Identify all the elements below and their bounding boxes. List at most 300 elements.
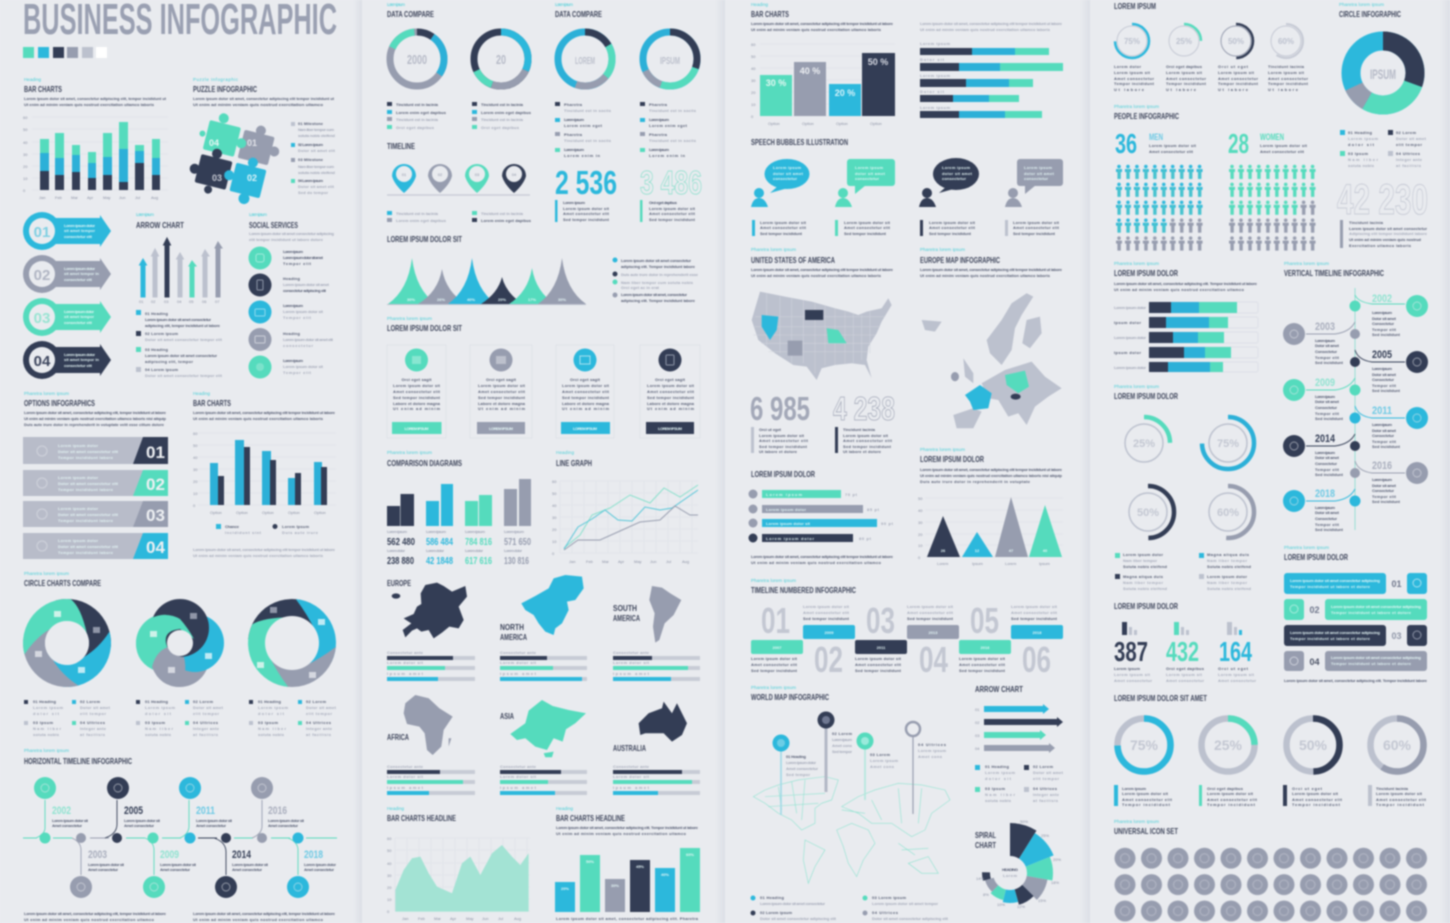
stacked horizontal bars: Lorem ipsum — [920, 41, 950, 46]
gauge legend: Soluta nobis eleifend — [1123, 564, 1168, 569]
icon progress bars: Ut enim ad minim veniam quis nostrud exercitation ullamco — [751, 560, 882, 565]
badge 04 — [23, 341, 111, 379]
vertical timeline: Dolor sit amet — [1372, 428, 1397, 433]
arrow chart legend: Dolor sit amet consectetur tempor elit — [145, 337, 223, 342]
row 04: Lorem ipsum dolor sit amet consectetur adipiscing — [1331, 655, 1422, 660]
big numbers: 3 486 — [640, 164, 702, 201]
card four: Orci eget sagit — [655, 377, 686, 382]
percent bar chart: 40% — [661, 872, 669, 877]
arrow chart legend two: dolor sit — [985, 776, 1012, 781]
grouped bar chart: Option — [236, 510, 248, 515]
puzzle legend: Dolor sit amet elit — [298, 184, 335, 189]
stat numbers: Amet consectetur — [1218, 678, 1256, 683]
big numbers: Lorem ipsum dolor sit — [649, 206, 696, 211]
pill row five — [1114, 362, 1258, 372]
bar chart legend: Lorem ipsum dolor sit amet, consectetur adipiscing elit tempor incididunt ut labore — [193, 547, 336, 552]
peak chart legend: Lorem ipsum dolor sit amet consectetur — [621, 258, 691, 263]
badge 03: consectetur elit — [64, 320, 93, 325]
stat numbers: Amet consectetur — [1166, 678, 1204, 683]
heading: bar charts: Heading — [24, 77, 41, 82]
people women — [1228, 128, 1318, 254]
vertical timeline: Dolor sit amet — [1315, 455, 1340, 460]
peak chart legend: Duis aute irure dolor in reprehenderit esse — [621, 272, 699, 277]
stacked bar chart: May — [103, 195, 111, 200]
puzzle legend: Nam liber tempor cum — [298, 164, 334, 169]
numbered timeline: Sed tempor incididunt — [803, 616, 850, 621]
percent column chart: 40 % — [800, 66, 820, 76]
donut legends: Tincidunt est in sociis — [649, 138, 697, 143]
line graph: Aug — [682, 559, 689, 564]
panel: column four — [1112, 1, 1430, 923]
small ring labels: Amet consectetur — [1114, 76, 1154, 81]
arrow chart — [139, 238, 222, 304]
icon progress bars: Lorem ipsum dolor sit — [766, 521, 811, 526]
map pin timeline — [387, 164, 530, 195]
donut legends: Orci eget dapibus — [481, 125, 520, 130]
big numbers: Sed tempor incididunt — [649, 217, 696, 222]
vertical timeline: Tempor elit — [1372, 327, 1397, 332]
gauge labels — [1133, 438, 1239, 519]
stacked horizontal bars — [920, 41, 1063, 118]
numbered timeline: Amet consectetur elit — [803, 610, 850, 615]
continent stat bars: Lorem dolor sit — [613, 660, 650, 665]
continent stat bars: Consectetur ante — [387, 650, 424, 655]
stacked bar chart: 60 — [23, 115, 28, 120]
line graph: Jul — [666, 559, 671, 564]
bubble mint: Sed tempor incididunt — [844, 231, 887, 236]
heading: social services: SOCIAL SERVICES — [249, 220, 298, 230]
horizontal timeline: Amet consectetur — [304, 867, 334, 872]
swirl ring legends: soluta nobis — [145, 732, 172, 737]
peak chart: 26% — [437, 297, 445, 302]
bottom donut labels: Amet consectetur elit — [1122, 797, 1173, 802]
bottom donut labels: Tempor incididunt — [1207, 802, 1256, 807]
card three: Lorem ipsum dolor sit — [562, 383, 610, 388]
world map pins: 02 Lorem — [832, 731, 852, 736]
outlined number: Tincidunt lacinia — [1349, 220, 1384, 225]
world map legend: Lorem ipsum dolor sit amet consectetur — [760, 901, 825, 906]
swirl ring legends: at facilisis — [193, 732, 219, 737]
horizontal timeline: Lorem ipsum dolor — [304, 862, 336, 867]
numbered timeline: Lorem ipsum dolor sit — [751, 656, 798, 661]
arrow chart legend two: 03 Ipsum — [985, 786, 1005, 791]
small ring labels: Lorem ipsum sit — [1268, 70, 1305, 75]
heading: USA map: Lorem ipsum dolor sit amet, consectetur adipiscing elit tempor incididunt ut labore — [751, 267, 894, 272]
bubble gray: Lorem ipsum dolor sit — [1013, 220, 1060, 225]
world map pins: Amet cons — [918, 754, 943, 759]
social services list: Heading — [283, 331, 301, 336]
vertical timeline — [1283, 288, 1428, 532]
puzzle legend: 04 Lorem ipsum — [298, 178, 323, 183]
heading: data compare — [387, 2, 602, 19]
heading: circle infographic: CIRCLE INFOGRAPHIC — [1339, 9, 1401, 19]
line graph: 20 — [552, 527, 557, 532]
numbered timeline: Sed tempor incididunt — [907, 616, 954, 621]
outlined number: Ut enim ad minim veniam quis nostrud — [1349, 237, 1422, 242]
percent column chart: 30 — [751, 78, 756, 83]
social services list: Lorem ipsum dolor sit amet — [283, 282, 330, 287]
area chart: Feb — [418, 916, 426, 921]
horizontal timeline: 2018 — [304, 849, 323, 861]
heading: USA map: Pharetra lorem ipsum — [751, 247, 796, 252]
vertical timeline: Sed incididunt — [1372, 332, 1401, 337]
heading: vertical timeline: VERTICAL TIMELINE INFOGRAPHIC — [1284, 268, 1384, 278]
comparison bars: 130 816 — [504, 556, 529, 567]
spiral chart: 50% — [1020, 819, 1028, 824]
heading: bar charts headline: BAR CHARTS HEADLINE — [387, 813, 456, 823]
bottom donut labels: Lorem ipsum dolor sit — [1376, 791, 1423, 796]
social services list: Lorem ipsum dolor sit amet — [283, 255, 324, 260]
heading: Europe map: Ut enim ad minim veniam quis nostrud exercitation ullamco laboris — [920, 273, 1051, 278]
heading: lorem ipsum dolor bars: LOREM IPSUM DOLOR — [751, 469, 815, 479]
stacked bar chart: 50 — [23, 127, 28, 132]
vertical timeline: Lorem ipsum — [1315, 450, 1335, 455]
heading: triangle chart: Lorem ipsum dolor sit amet, consectetur adipiscing elit tempor incididunt ut labore — [920, 467, 1063, 472]
vertical timeline: Tempor elit — [1315, 355, 1340, 360]
heading: bar charts three: Ut enim ad minim veniam quis nostrud exercitation ullamco laboris — [920, 27, 1051, 32]
pill row two: Ipsum dolor — [1114, 320, 1141, 325]
badge 01: 01 — [34, 224, 50, 241]
horizontal timeline: Amet consectetur — [196, 823, 226, 828]
big numbers and notes: Amet consectetur elit — [759, 438, 809, 443]
people men: Amet consectetur elit — [1149, 149, 1194, 154]
social services list: Lorem ipsum — [283, 303, 303, 308]
map: Europe highlighted — [922, 293, 1062, 428]
big numbers and notes: Tincidunt lacinia — [843, 427, 876, 432]
stat numbers: 387 — [1114, 636, 1148, 667]
arrow chart legend: 01 Heading — [145, 311, 169, 316]
donut one — [390, 32, 444, 86]
numbered timeline: 03 — [866, 600, 895, 641]
card one: LOREM IPSUM — [404, 426, 429, 431]
world map legend: 03 Lorem ipsum — [872, 895, 906, 900]
people women: 28 — [1228, 128, 1249, 159]
stacked bar chart: 30 — [23, 152, 28, 157]
card four: Ut enim ad minim — [647, 406, 694, 411]
arrow chart legend: Lorem ipsum dolor sit amet consectetur — [145, 353, 217, 358]
grouped bar chart: 60 — [193, 431, 198, 436]
swirl ring legends: at facilisis — [80, 732, 106, 737]
puzzle graphic: 01 — [247, 138, 257, 148]
universal icon grid — [1112, 845, 1430, 923]
people men: 36 — [1115, 128, 1137, 159]
swirl ring legends: 02 Lorem — [193, 699, 213, 704]
heading: lorem ipsum small rings: LOREM IPSUM — [1114, 1, 1156, 11]
vertical timeline: 2018 — [1315, 488, 1335, 500]
swirl ring legends: dolor sit — [145, 711, 172, 716]
comparison bars: Lorem ipsum — [387, 529, 407, 534]
peak chart legend: Orci eget ac in erat — [621, 285, 660, 290]
option 02: 02 — [146, 475, 165, 494]
map: Europe: EUROPE — [387, 578, 411, 588]
horizontal timeline: Amet consectetur — [124, 823, 154, 828]
donut legends: Tincidunt est in lacinia — [481, 102, 524, 107]
donut legends: Tincidunt est in sociis — [564, 138, 612, 143]
vertical timeline: Consectetur — [1372, 488, 1394, 493]
stat numbers: Lorem ipsum sit — [1166, 672, 1203, 677]
badge 04: sit amet tempor in — [64, 357, 100, 362]
swirl ring legends: Integer ante — [80, 726, 107, 731]
map pin timeline: 02 — [438, 172, 443, 177]
swirl ring legends: Nam liber — [145, 726, 173, 731]
large donut legend: Dolor sit amet — [1396, 136, 1427, 141]
spiral chart: 10% — [997, 902, 1005, 907]
bottom donut labels: Orci ut eget — [1292, 786, 1323, 791]
vertical timeline: Lorem ipsum — [1315, 505, 1335, 510]
comparison bars: Lorem dolor — [465, 548, 483, 553]
vertical timeline: Dolor sit amet — [1315, 399, 1340, 404]
vertical timeline: 2009 — [1315, 377, 1335, 389]
vertical timeline: Tempor elit — [1372, 383, 1397, 388]
footer text column one — [24, 911, 336, 922]
option 04: Dolor sit amet consectetur elit — [58, 544, 119, 549]
heading: circle infographic: Pharetra lorem ipsum — [1339, 2, 1384, 7]
bottom donut labels: Amet consectetur elit — [1292, 797, 1343, 802]
option 04 — [23, 533, 168, 559]
card one: Sed tempor incididunt — [393, 395, 441, 400]
timeline legend: Tincidunt est in lacinia — [481, 211, 524, 216]
arrow chart: 02 — [151, 299, 156, 304]
vertical timeline: Tempor elit — [1372, 494, 1397, 499]
world map pins: Lorem ipsum — [918, 748, 946, 753]
bottom donut labels: Tincidunt lacinia — [1376, 786, 1409, 791]
numbered timeline: Sed tempor incididunt — [855, 668, 902, 673]
bottom donut labels: Lorem ipsum — [1122, 786, 1146, 791]
continents — [387, 575, 687, 757]
card one: Lorem ipsum dolor sit — [393, 383, 441, 388]
continent stat bars: Consectetur ante — [613, 650, 650, 655]
small ring labels: 75% — [1124, 37, 1140, 46]
bubble gray: Amet consectetur elit — [1013, 225, 1060, 230]
donut legends: Lorem enim eget dapibus — [481, 110, 532, 115]
donut labels: IPSUM — [660, 56, 680, 67]
heading: timeline: TIMELINE — [387, 141, 415, 151]
big numbers: Lorem ipsum dolor sit — [563, 206, 610, 211]
donut legends: Pharetra — [564, 102, 583, 107]
percent column chart: 60 — [751, 42, 756, 47]
numbered timeline: 05 — [970, 600, 999, 641]
triangle chart: 26 — [941, 548, 946, 553]
numbered timeline: Amet consectetur elit — [751, 662, 798, 667]
heading: puzzle infographic: Lorem ipsum dolor sit amet, consectetur adipiscing elit tempor incididunt ut — [193, 96, 335, 101]
bottom donut labels: Lorem ipsum dolor sit — [1292, 791, 1339, 796]
donut legends: Lorem ipsum — [649, 117, 669, 122]
card two: Ut enim ad minim — [478, 406, 525, 411]
peak chart legend: adipiscing elit. Tempor incididunt labore — [621, 264, 696, 269]
donut labels: LOREM — [575, 56, 595, 67]
swirl ring three — [236, 587, 348, 699]
map: South America: AMERICA — [613, 613, 640, 623]
puzzle legend: Nam liber tempor cum — [298, 127, 334, 132]
continent stat bars: Consectetur ante — [613, 764, 650, 769]
heading: USA map — [751, 247, 894, 278]
option 01: Tempor incididunt labore — [58, 455, 114, 460]
heading: bar charts headline right — [556, 806, 699, 836]
donut legends: Lorem enim in — [564, 153, 601, 158]
bottom donut labels: Orci eget dapibus — [1207, 786, 1244, 791]
horizontal timeline: 2011 — [196, 805, 215, 817]
percent bar chart — [555, 848, 700, 921]
map: Africa — [387, 695, 453, 755]
card two: Labore et dolore magna — [478, 401, 526, 406]
stacked bar chart: Jul — [135, 195, 140, 200]
numbered timeline: Sed tempor incididunt — [959, 668, 1006, 673]
option 04: Lorem ipsum dolor — [58, 538, 98, 543]
grouped bar chart: 40 — [193, 455, 198, 460]
donut legends: Tincidunt est in lacinia — [481, 117, 524, 122]
bubble blue — [751, 159, 810, 236]
percent column chart: Option — [870, 121, 882, 126]
large donut legend: 02 Lorem — [1396, 130, 1416, 135]
large donut legend: 04 Ultrices — [1396, 151, 1421, 156]
comparison bars: 42 1848 — [426, 556, 453, 567]
vertical timeline: Dolor sit amet — [1372, 316, 1397, 321]
vertical timeline: 2005 — [1372, 349, 1392, 361]
vertical timeline: Sed incididunt — [1315, 472, 1344, 477]
donut labels: 2000 — [407, 52, 427, 67]
bubble navy: Sed tempor incididunt — [929, 231, 972, 236]
arrow chart legend: adipiscing elit, tempor — [145, 359, 193, 364]
line graph — [552, 479, 698, 564]
social services list: Tempor elit — [283, 315, 312, 320]
swirl ring legends: 01 Heading — [258, 699, 282, 704]
small ring labels: 50% — [1228, 37, 1244, 46]
spiral chart: 8% — [983, 892, 989, 897]
puzzle legend: 01 Milestone — [298, 121, 324, 126]
icon progress bars: Lorem ipsum dolor — [766, 507, 806, 512]
continent stat bars: Ipsum amet — [613, 671, 650, 676]
swirl ring legends: Dolor sit amet — [80, 705, 111, 710]
card one: Ut enim ad minim — [393, 406, 440, 411]
option 01: Lorem ipsum dolor — [58, 443, 98, 448]
percent column chart: 0 — [751, 114, 754, 119]
heading: lorem ipsum gauges: LOREM IPSUM DOLOR — [1114, 391, 1178, 401]
map pin timeline: 03 — [475, 172, 480, 177]
big numbers and notes: 4 238 — [833, 390, 895, 427]
numbered timeline: 04 — [919, 639, 948, 680]
heading: arrow chart — [136, 212, 185, 230]
heading: people infographic — [1114, 104, 1179, 121]
badge 04: consectetur elit — [64, 363, 93, 368]
heading: options infographics: Duis aute irure dolor in reprehenderit in voluptate velit esse cillum dolore — [24, 422, 165, 427]
row 01 — [1284, 573, 1427, 594]
triangle chart: 40 — [1043, 548, 1048, 553]
swirl ring legends: Integer ante — [306, 726, 333, 731]
arrow chart legend: adipiscing elit, tempor incididunt ut labore — [145, 323, 221, 328]
bar chart legend: Incididunt sint — [225, 530, 262, 535]
small ring labels — [1114, 37, 1309, 92]
vertical timeline: Tempor elit — [1315, 467, 1340, 472]
map pin timeline: 01 — [402, 172, 407, 177]
swirl ring legends: Nam liber — [258, 726, 286, 731]
badge 02: 02 — [34, 267, 50, 284]
grouped bar chart: 0 — [193, 503, 196, 508]
peak chart legend: Nam liber tempor cum soluta nobis — [621, 280, 694, 285]
area chart: 20 — [387, 885, 392, 890]
icon progress bars: Lorem ipsum — [766, 492, 802, 497]
bottom donut labels: 75% — [1130, 737, 1159, 753]
row 04: 04 — [1309, 657, 1320, 667]
grouped bar chart: 30 — [193, 467, 198, 472]
vertical timeline: Dolor sit amet — [1315, 343, 1340, 348]
row 03: Tempor incididunt ut labore et dolore — [1290, 636, 1371, 641]
card two — [470, 345, 532, 438]
large donut legend: Integer ante — [1396, 157, 1423, 162]
grouped bar chart — [193, 431, 336, 515]
vertical timeline: 2014 — [1315, 433, 1336, 445]
donut legends: Lorem ipsum — [564, 147, 584, 152]
swirl ring legends: 03 Ipsum — [258, 720, 278, 725]
gauge labels: 25% — [1133, 438, 1155, 450]
card one: Labore et dolore magna — [393, 401, 441, 406]
swirl ring legends — [24, 699, 337, 737]
card three: Ut enim ad minim — [562, 406, 609, 411]
panel: column one — [23, 0, 348, 922]
arrow chart legend two: Lorem ipsum — [985, 770, 1015, 775]
numbered timeline: 2007 — [773, 645, 782, 650]
bubble navy: dolor sit amet — [942, 171, 973, 176]
numbered timeline: Amet consectetur elit — [1011, 610, 1058, 615]
vertical timeline: Sed incididunt — [1315, 360, 1344, 365]
map: Europe — [387, 578, 467, 638]
percent bar chart: 45% — [636, 864, 644, 869]
small ring labels: 60% — [1278, 37, 1294, 46]
vertical timeline: Dolor sit amet — [1372, 483, 1397, 488]
heading: comparison and line graph: Pharetra lorem ipsum — [387, 450, 432, 455]
numbered timeline: Amet consectetur elit — [855, 662, 902, 667]
colour swatches — [23, 47, 107, 58]
gauge legend: Nam liber tempor — [1207, 558, 1247, 563]
row 02 — [1284, 599, 1427, 620]
stacked bar chart: Jan — [39, 195, 45, 200]
vertical timeline: Consectetur — [1315, 405, 1337, 410]
horizontal arrow chart: 02 — [975, 720, 980, 725]
option 03 — [23, 501, 168, 527]
stat numbers: Lorem ipsum sit — [1114, 672, 1151, 677]
bar chart legend: Ut enim ad minim veniam quis nostrud exercitation ullamco laboris — [193, 553, 324, 558]
numbered timeline: 02 — [814, 639, 843, 680]
numbered timeline: Lorem ipsum dolor sit — [855, 656, 902, 661]
grouped bar chart: Option — [210, 510, 222, 515]
small ring labels: Ut labore — [1268, 87, 1299, 92]
area chart: Jun — [482, 916, 488, 921]
card one — [387, 345, 446, 438]
bottom donut labels: Tempor incididunt — [1376, 802, 1425, 807]
badge 03 — [23, 298, 111, 336]
stacked bar chart: Aug — [151, 195, 158, 200]
big numbers and notes: Orci ut eget — [759, 427, 782, 432]
gauge legend: Nam liber tempor — [1123, 580, 1163, 585]
option 01: 01 — [146, 443, 165, 462]
comparison bars: Lorem ipsum — [426, 529, 446, 534]
heading: lorem ipsum dolor sit amet: LOREM IPSUM DOLOR SIT AMET — [1114, 693, 1208, 703]
heading: lorem ipsum dolor bars: Lorem ipsum dolor sit amet, consectetur adipiscing elit. Tempor incididunt ut labore — [1114, 281, 1258, 286]
heading: bar charts: Ut enim ad minim veniam quis nostrud exercitation ullamco laboris — [24, 102, 155, 107]
donut legends: Pharetra — [649, 132, 668, 137]
heading: horizontal timeline — [24, 748, 132, 766]
swirl ring legends: dolor sit — [258, 711, 285, 716]
map: North America — [500, 575, 584, 642]
vertical timeline: Lorem ipsum — [1372, 310, 1392, 315]
spiral chart: 18% — [1051, 880, 1059, 885]
area chart: 0 — [387, 909, 390, 914]
heading: cards: Pharetra lorem ipsum — [387, 316, 432, 321]
map: Africa: AFRICA — [387, 732, 409, 742]
badge 02: consectetur elit — [64, 277, 93, 282]
vertical timeline: Dolor sit amet — [1372, 372, 1397, 377]
arrow chart legend two: 04 Ultrices — [1033, 786, 1058, 791]
numbered timeline: Sed tempor incididunt — [751, 668, 798, 673]
